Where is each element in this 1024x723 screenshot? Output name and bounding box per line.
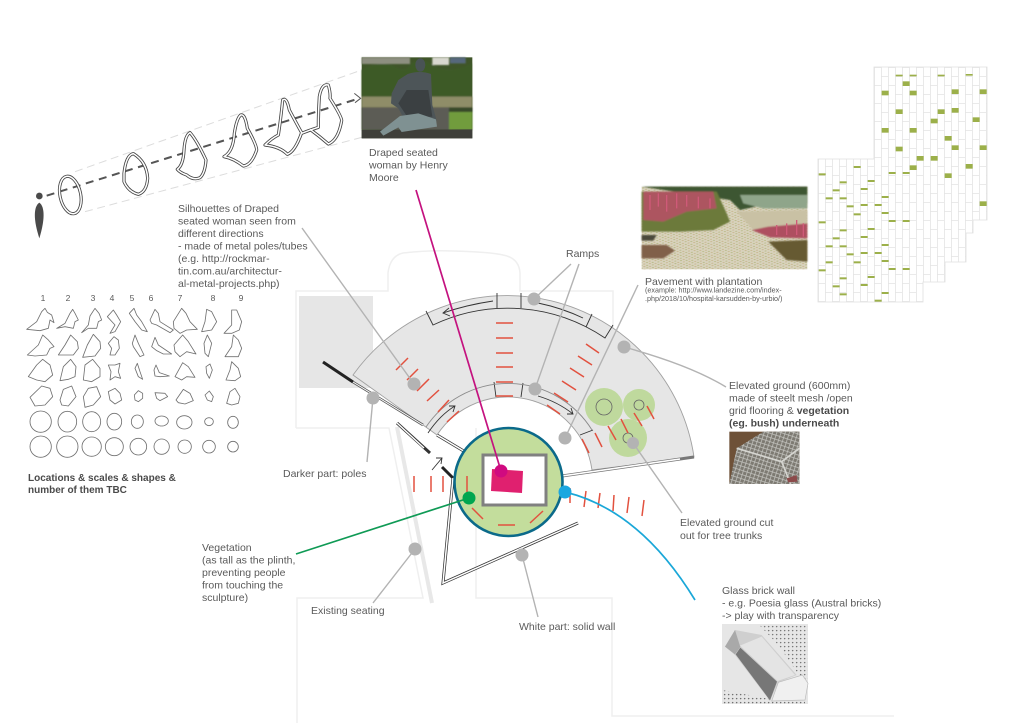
caption: glass brick wall bbox=[722, 585, 881, 622]
caption: silhouettes: Silhouettes of Draped bbox=[178, 203, 279, 215]
sculpture plinth circle bbox=[454, 428, 562, 536]
caption: elevated ground: grid flooring & vegetation bbox=[729, 405, 849, 417]
white solid walls bbox=[437, 435, 694, 583]
silhouette column numbers: 6 bbox=[149, 293, 154, 303]
caption: poles: Darker part: poles bbox=[283, 468, 366, 480]
green bricks upper bbox=[882, 74, 987, 206]
caption: silhouettes: different directions bbox=[178, 228, 264, 240]
caption: pavement: .php/2018/10/hospital-karsudden-by-urbio/) bbox=[645, 294, 782, 303]
caption: sculpture: Moore bbox=[369, 172, 399, 184]
entrance arrow bbox=[432, 458, 442, 470]
grey leaders bbox=[302, 228, 726, 617]
caption: solid wall: White part: solid wall bbox=[519, 621, 615, 633]
silhouette matrix bbox=[27, 308, 242, 457]
caption: silhouettes bbox=[178, 203, 308, 290]
caption: vegetation: sculpture) bbox=[202, 592, 248, 604]
silhouette column numbers bbox=[41, 293, 244, 303]
photo: steel mesh bbox=[729, 432, 799, 484]
caption: sculpture bbox=[368, 147, 449, 184]
brick wall elevation grid bbox=[818, 67, 987, 302]
metal tube rings bbox=[56, 85, 342, 216]
darker part poles walls bbox=[323, 362, 453, 478]
caption: vegetation: (as tall as the plinth, bbox=[202, 554, 295, 566]
caption: elevated ground bbox=[729, 380, 853, 430]
caption: glass brick wall: - e.g. Poesia glass (Austral bricks) bbox=[722, 598, 881, 610]
perspective diagram: silhouettes along sight line bbox=[35, 70, 362, 238]
caption: ramps: Ramps bbox=[566, 248, 599, 260]
viewer figure bbox=[35, 193, 44, 238]
caption: silhouettes: - made of metal poles/tubes bbox=[178, 240, 308, 252]
sight line arrow bbox=[47, 93, 361, 196]
caption: pavement: Pavement with plantation bbox=[645, 276, 762, 288]
caption: silhouettes: seated woman seen from bbox=[178, 216, 296, 228]
silhouette column numbers: 7 bbox=[178, 293, 183, 303]
caption: silhouettes: al-metal-projects.php) bbox=[178, 278, 280, 290]
note: locations: Locations & scales & shapes & bbox=[28, 473, 176, 484]
ramps bbox=[426, 293, 613, 435]
caption: sculpture: woman by Henry bbox=[368, 160, 449, 172]
caption: elevated ground: made of steelt mesh /open bbox=[729, 392, 853, 404]
silhouette column numbers: 9 bbox=[239, 293, 244, 303]
caption: sculpture: Draped seated bbox=[369, 147, 438, 159]
silhouette column numbers: 5 bbox=[130, 293, 135, 303]
leader: vegetation green bbox=[296, 492, 476, 554]
caption: elevated ground: Elevated ground (600mm) bbox=[729, 380, 850, 392]
note: locations: number of them TBC bbox=[28, 485, 127, 496]
caption: vegetation: from touching the bbox=[202, 580, 283, 592]
caption: elevated ground: (eg. bush) underneath bbox=[729, 418, 839, 430]
caption: tree trunks: Elevated ground cut bbox=[680, 517, 773, 529]
caption: glass brick wall: -> play with transparency bbox=[722, 610, 840, 622]
existing seating strip bbox=[397, 427, 432, 603]
caption: pavement bbox=[645, 276, 782, 303]
caption: existing seating: Existing seating bbox=[311, 605, 385, 617]
caption: vegetation: Vegetation bbox=[202, 542, 252, 554]
silhouette column numbers: 4 bbox=[110, 293, 115, 303]
site outline bbox=[296, 251, 894, 723]
elevated ground fan bbox=[353, 296, 694, 470]
vegetation red markers bbox=[396, 323, 654, 516]
caption: glass brick wall: Glass brick wall bbox=[722, 585, 795, 597]
existing building block bbox=[299, 296, 373, 388]
leader: glass brick blue bbox=[558, 486, 695, 600]
tree cut outs bbox=[585, 388, 655, 457]
note: locations bbox=[28, 473, 176, 496]
caption: tree trunks: out for tree trunks bbox=[680, 530, 762, 542]
caption: vegetation bbox=[202, 542, 295, 604]
caption: silhouettes: (e.g. http://rockmar- bbox=[178, 253, 270, 265]
silhouette column numbers: 1 bbox=[41, 293, 46, 303]
silhouette column numbers: 8 bbox=[211, 293, 216, 303]
caption: tree trunks bbox=[680, 517, 773, 542]
caption: silhouettes: tin.com.au/architectur- bbox=[178, 266, 282, 278]
leader: sculpture pink bbox=[416, 190, 508, 478]
photo: pavement with plantation bbox=[642, 187, 807, 269]
green bricks lower bbox=[819, 166, 910, 302]
caption: pavement: (example: http://www.landezine.com/index- bbox=[645, 286, 782, 294]
caption: vegetation: preventing people bbox=[202, 567, 286, 579]
photo: glass brick bbox=[722, 624, 808, 704]
silhouette column numbers: 2 bbox=[66, 293, 71, 303]
photo: sculpture bbox=[362, 57, 472, 138]
silhouette column numbers: 3 bbox=[91, 293, 96, 303]
